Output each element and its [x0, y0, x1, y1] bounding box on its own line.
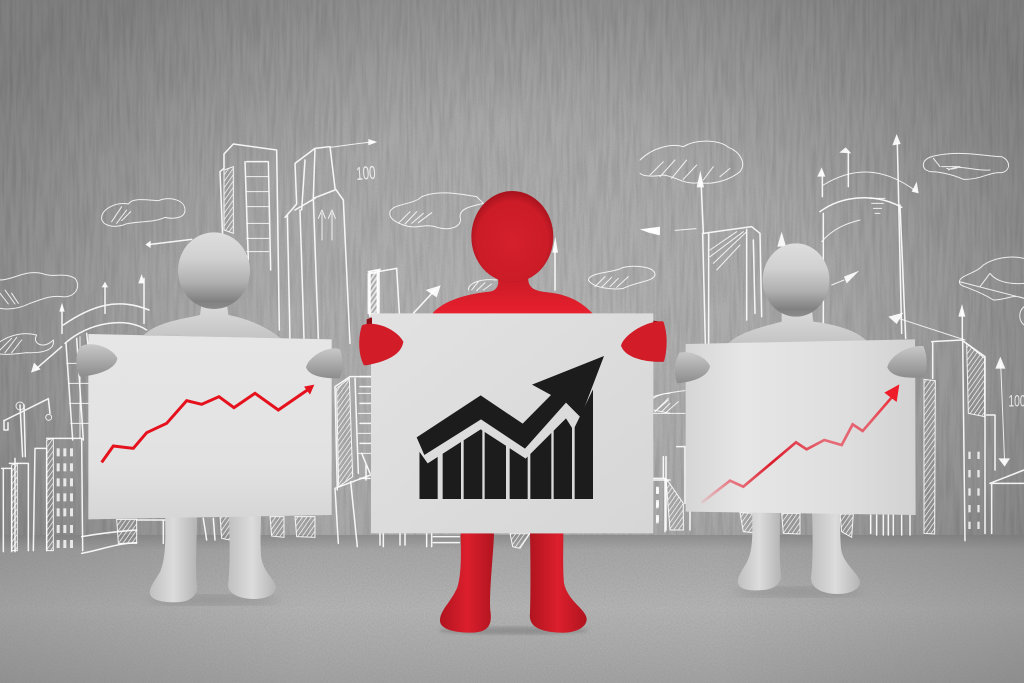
sign [88, 334, 332, 519]
cloud sketch right [588, 266, 655, 289]
figure: left grey figure [76, 232, 343, 605]
red rising line [102, 385, 314, 462]
right hand [887, 346, 927, 378]
cloud sketch upper right [923, 153, 1009, 179]
floor shadow [734, 587, 862, 597]
right hand [621, 321, 667, 362]
right tall building [932, 304, 985, 541]
small building [368, 268, 399, 313]
arrowhead above right head [777, 232, 786, 247]
dash arrow [640, 227, 660, 235]
skyscraper behind right of left figure [335, 269, 380, 547]
tower with ladder windows [220, 144, 279, 330]
right hand [306, 348, 343, 378]
cloud sketch [390, 193, 483, 229]
floor shadow [438, 627, 588, 635]
cloud sketch lower left [0, 334, 53, 354]
sketched block building [703, 227, 762, 343]
arrow pointing down-left [31, 347, 62, 373]
hatches below right sign [740, 513, 910, 537]
torso [144, 303, 281, 338]
bar chart [419, 380, 593, 499]
cloud sketch top [640, 141, 743, 183]
domed tower [820, 198, 906, 338]
hatched blocks below left sign [117, 517, 315, 543]
arrow right of head [552, 237, 558, 290]
crane sketch [4, 399, 52, 457]
sign [371, 313, 653, 533]
left hand [76, 344, 117, 377]
head [763, 243, 829, 317]
arc with three arrows [817, 134, 919, 333]
fading red rising line [702, 384, 899, 503]
torso [728, 308, 867, 343]
diagonal pointer [888, 313, 965, 340]
small house sketch [987, 415, 1024, 533]
chalk sketch: centre skyline [360, 193, 670, 548]
hatched building left of right sign [653, 391, 690, 532]
arched building and upward arrows [59, 274, 149, 440]
torso [432, 273, 593, 314]
head [471, 191, 553, 282]
legs [738, 510, 860, 594]
cloud sketch [102, 199, 185, 226]
black growth arrow [417, 356, 604, 455]
dash arrow left [640, 227, 696, 235]
fragments below centre sign [380, 533, 530, 548]
legs [150, 515, 276, 602]
rising arrow sketch [413, 285, 441, 313]
fragments right of centre sign [653, 393, 670, 530]
left hand [675, 352, 710, 383]
background wall [0, 0, 1024, 540]
hatched strip building [924, 379, 935, 534]
bottom-left buildings [2, 438, 137, 553]
handwritten number 100: 100 [356, 163, 377, 185]
figure: centre red figure [359, 191, 667, 635]
chalk sketch: right skyline [640, 134, 1024, 541]
arrow pointing left [145, 239, 192, 248]
head [178, 232, 250, 309]
left hand [359, 317, 403, 365]
chalk sketch: left skyline [0, 139, 380, 553]
ladder fragment left [360, 377, 371, 480]
cloud sketch lower right [959, 257, 1024, 325]
sign [686, 339, 916, 515]
dash arrow near head [832, 271, 859, 285]
figure: right grey figure [675, 243, 927, 597]
double-headed measure arrow [995, 357, 1010, 467]
legs [440, 533, 587, 633]
long arrow over building [697, 171, 704, 233]
floor shadow [147, 595, 279, 605]
floor [0, 535, 1024, 683]
tall tower with small arrows [285, 139, 377, 343]
small cloud sketch [468, 280, 497, 291]
cloud sketch left [0, 273, 78, 309]
